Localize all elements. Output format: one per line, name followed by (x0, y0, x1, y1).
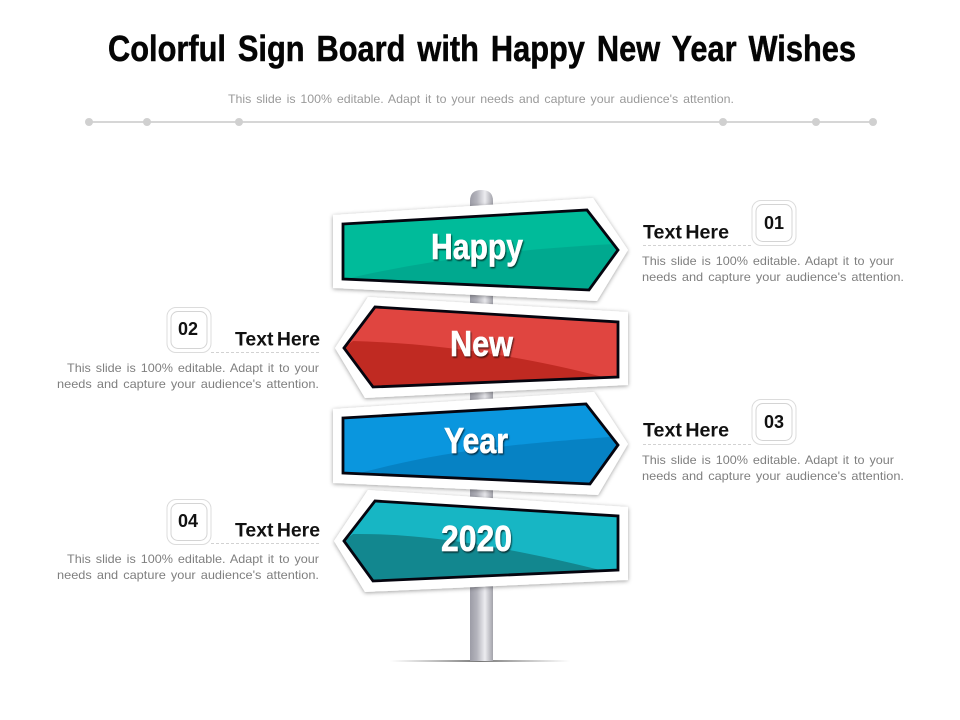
callout 04: This slide is 100% editable. Adapt it to your (67, 552, 319, 566)
subtitle: This slide is 100% editable. Adapt it to your needs and capture your audience's attention. (228, 92, 734, 106)
callout 03: Text Here (643, 420, 729, 442)
decorative dotted timeline rule (85, 118, 877, 126)
callout 01: needs and capture your audience's attention. (642, 270, 904, 284)
sign: Happy (333, 198, 628, 301)
callout 01 (642, 200, 904, 284)
sign: Year: Year (444, 420, 508, 461)
callout 04 (57, 500, 320, 582)
title: Colorful Sign Board with Happy New Year Wishes (108, 28, 856, 69)
sign: Year (333, 392, 628, 495)
callout 01: This slide is 100% editable. Adapt it to your (642, 254, 894, 268)
sign: 2020 (334, 490, 628, 592)
callout 03: needs and capture your audience's attention. (642, 469, 904, 483)
callout 02: Text Here (235, 330, 320, 350)
callout 02: This slide is 100% editable. Adapt it to your (67, 361, 319, 375)
callout 03: This slide is 100% editable. Adapt it to your (642, 453, 894, 467)
sign: Happy: Happy (431, 226, 523, 267)
callout 01: Text Here (643, 222, 729, 244)
callout 02: needs and capture your audience's attention. (57, 377, 319, 391)
callout 01: 01 (764, 213, 784, 233)
callout 04: Text Here (235, 520, 320, 542)
callout 04: needs and capture your audience's attention. (57, 568, 319, 582)
sign: 2020: 2020 (441, 518, 512, 559)
signpost pole (390, 190, 570, 662)
callout 04: 04 (178, 511, 198, 531)
callout 02: 02 (178, 319, 198, 339)
callout 02 (57, 308, 320, 391)
callout 03 (642, 400, 904, 483)
sign: New: New (450, 323, 514, 364)
callout 03: 03 (764, 412, 784, 432)
sign: New (335, 297, 628, 398)
